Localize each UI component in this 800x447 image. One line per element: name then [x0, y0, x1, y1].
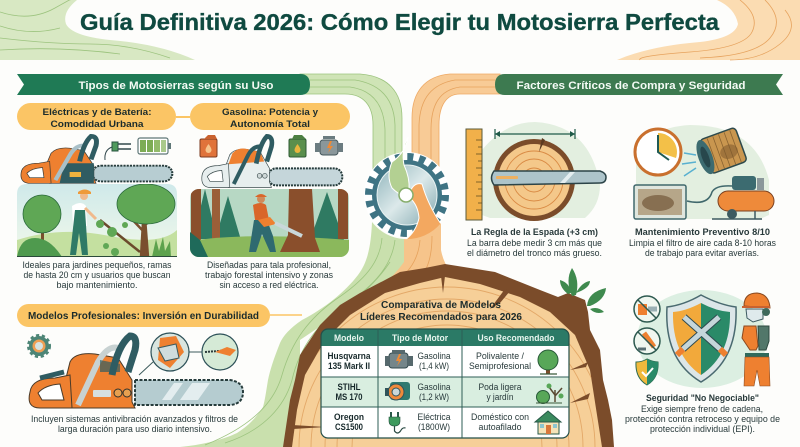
comparison table: Gasolina — [418, 351, 451, 361]
captions: gasoline: sin acceso a red eléctrica. — [220, 280, 318, 290]
comparison table: Semiprofesional — [469, 361, 531, 371]
comparison table: 135 Mark II — [328, 361, 370, 371]
title: Guía Definitiva 2026: Cómo Elegir tu Motosierra Perfecta — [80, 9, 719, 35]
icon: guide bar — [492, 171, 606, 185]
captions: electric — [22, 260, 172, 290]
comparison table: STIHL — [338, 382, 361, 392]
caption: professional: Incluyen sistemas antivibración avanzados y filtros de — [31, 414, 238, 424]
orange wood ribbon upper — [412, 74, 500, 170]
comparison table: (1800W) — [418, 422, 450, 432]
panel: bar rule — [466, 122, 606, 221]
caption: bar rule: La barra debe medir 3 cm más que — [467, 238, 602, 248]
icon: compressor — [687, 176, 774, 219]
right section banner — [495, 74, 783, 95]
orange wood ribbon lower — [382, 223, 465, 285]
pill: modelos profesionales — [17, 304, 270, 327]
icon: log slice — [493, 138, 575, 221]
caption: safety: protección contra retroceso y equipo de — [625, 414, 780, 424]
caption: bar rule: el diámetro del tronco más grueso. — [467, 248, 602, 258]
scene: gardener pruning — [15, 184, 178, 257]
caption: maintenance: de trabajo para evitar averías. — [645, 248, 759, 258]
icon: green fuel can — [289, 135, 306, 157]
icon: gloves — [742, 326, 769, 350]
comparison table — [321, 329, 569, 438]
captions: electric: bajo mantenimiento. — [56, 280, 138, 290]
professional chainsaw — [29, 336, 243, 408]
electric chainsaw — [21, 136, 172, 183]
comparison table: y jardín — [486, 392, 514, 402]
icon: water spray — [682, 153, 696, 176]
pill: gasolina: Autonomía Total — [230, 119, 310, 130]
caption: safety — [625, 393, 780, 434]
green wood ribbon upper — [300, 74, 402, 170]
log bark — [283, 264, 614, 447]
captions: gasoline: trabajo forestal intensivo y zonas — [205, 270, 333, 280]
captions: gasoline: Diseñadas para tala profesional, — [207, 260, 331, 270]
panel: safety — [634, 290, 770, 388]
comparison table: Poda ligera — [478, 382, 522, 392]
caption: maintenance: Limpia el filtro de aire cada 8-10 horas — [629, 238, 776, 248]
pill: gasolina — [190, 103, 350, 130]
left section banner: Tipos de Motosierras según su Uso — [78, 80, 274, 92]
caption: professional — [31, 414, 238, 434]
caption: bar rule: La Regla de la Espada (+3 cm) — [471, 227, 598, 238]
caption: safety: Seguridad "No Negociable" — [646, 393, 759, 404]
saw blade emblem — [364, 137, 450, 240]
icon: gas engine — [385, 350, 413, 368]
pill: eléctricas — [17, 103, 176, 130]
caption: bar rule — [467, 227, 602, 258]
pill: modelos profesionales: Modelos Profesionales: Inversión en Durabilidad — [28, 310, 259, 322]
icon: orange engine — [385, 382, 410, 400]
comparison table: Tipo de Motor — [392, 333, 448, 343]
comparison table: Modelo — [334, 333, 364, 343]
table heading — [360, 299, 522, 323]
green wood sweep lower — [180, 222, 404, 447]
caption: safety: protección individual (EPI). — [650, 424, 755, 434]
captions: electric: Ideales para jardines pequeños, ramas — [22, 260, 172, 270]
left section banner — [17, 74, 310, 95]
table heading: Líderes Recomendados para 2026 — [360, 311, 522, 323]
comparison table: Oregon — [334, 412, 364, 422]
log wood rings — [285, 270, 610, 447]
petrol chainsaw — [202, 136, 342, 187]
icon: battery — [138, 138, 171, 154]
comparison table: (1,2 kW) — [419, 392, 449, 402]
caption: safety: Exige siempre freno de cadena, — [641, 404, 763, 414]
icon: no hand on chain — [634, 296, 660, 322]
comparison table: MS 170 — [336, 392, 363, 402]
caption: maintenance: Mantenimiento Preventivo 8/10 — [635, 227, 770, 238]
right section banner: Factores Críticos de Compra y Seguridad — [516, 80, 746, 92]
caption: maintenance — [629, 227, 776, 258]
comparison table: Gasolina — [418, 382, 451, 392]
decorative wood header left — [0, 0, 195, 60]
icon: shield — [667, 295, 736, 382]
icon: air filter — [693, 127, 747, 176]
comparison table: Polivalente / — [476, 351, 525, 361]
pill: eléctricas: Eléctricas y de Batería: — [42, 107, 152, 118]
icon: measure arrow — [495, 129, 575, 139]
scene: forester felling tree — [190, 189, 349, 257]
captions: gasoline — [205, 260, 333, 290]
log with comparison table — [283, 264, 614, 447]
icon: helmet — [742, 293, 770, 322]
icon: ruler — [466, 129, 482, 220]
panel: maintenance — [634, 125, 774, 219]
pill: gasolina: Gasolina: Potencia y — [222, 107, 319, 118]
icon: flat filter — [634, 185, 686, 219]
captions: electric: de hasta 20 cm y usuarios que buscan — [24, 270, 170, 280]
pill connector — [176, 116, 190, 118]
icon: check shield — [636, 359, 658, 385]
comparison table: (1,4 kW) — [419, 361, 449, 371]
comparison table: Eléctrica — [418, 412, 451, 422]
icon: protective trousers — [744, 353, 770, 386]
comparison table: Husqvarna — [328, 351, 371, 361]
icon: tree — [538, 350, 558, 374]
icon: engine — [315, 136, 343, 155]
connector line from professional pill — [270, 314, 302, 316]
icon: orange fuel can — [200, 135, 217, 157]
icon: clock — [635, 129, 681, 175]
comparison table: autoafilado — [478, 422, 522, 432]
icon: gear — [29, 336, 49, 356]
leaves on stump — [560, 268, 606, 313]
icon: no kickback — [634, 328, 660, 354]
table heading: Comparativa de Modelos — [381, 299, 501, 311]
icon: pruned shrub — [536, 384, 564, 404]
comparison table: Uso Recomendado — [478, 333, 555, 343]
icon: electric plug — [389, 412, 406, 433]
icon: plug — [105, 142, 131, 160]
comparison table: Doméstico con — [471, 412, 529, 422]
pill: eléctricas: Comodidad Urbana — [50, 119, 144, 130]
comparison table: CS1500 — [335, 422, 363, 432]
decorative wood header right — [617, 0, 800, 60]
detail circles: antivibration and chain — [139, 333, 238, 375]
caption: professional: larga duración para uso diario intensivo. — [58, 424, 212, 434]
icon: house — [535, 411, 561, 434]
